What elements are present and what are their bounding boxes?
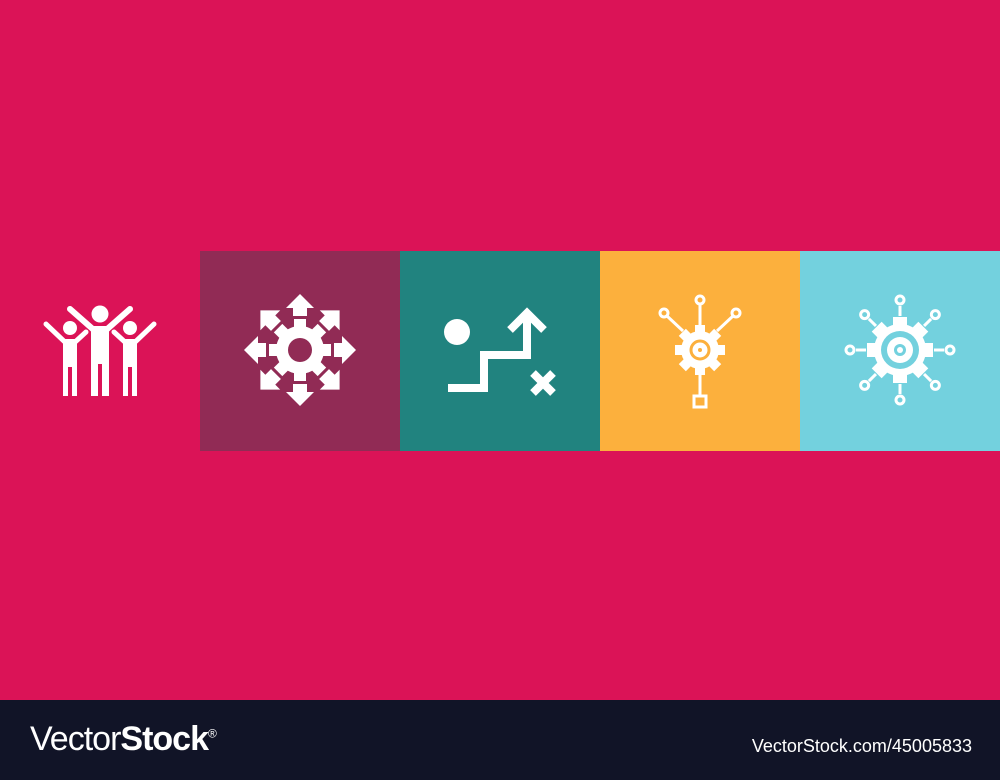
- icon: people celebrating: [46, 306, 154, 396]
- url text: VectorStock.com/45005833: [752, 736, 972, 756]
- logo text: VectorStock®: [30, 720, 216, 758]
- footer: [0, 700, 1000, 780]
- icon: gear hub: [846, 296, 954, 404]
- panel: orange: [600, 251, 800, 451]
- icon: stairs path: [444, 313, 553, 393]
- panel: plum: [200, 251, 400, 451]
- panel: teal: [400, 251, 600, 451]
- icon: gear network: [660, 296, 740, 407]
- panel: light blue: [800, 251, 1000, 451]
- icon: gear with arrows: [244, 294, 356, 406]
